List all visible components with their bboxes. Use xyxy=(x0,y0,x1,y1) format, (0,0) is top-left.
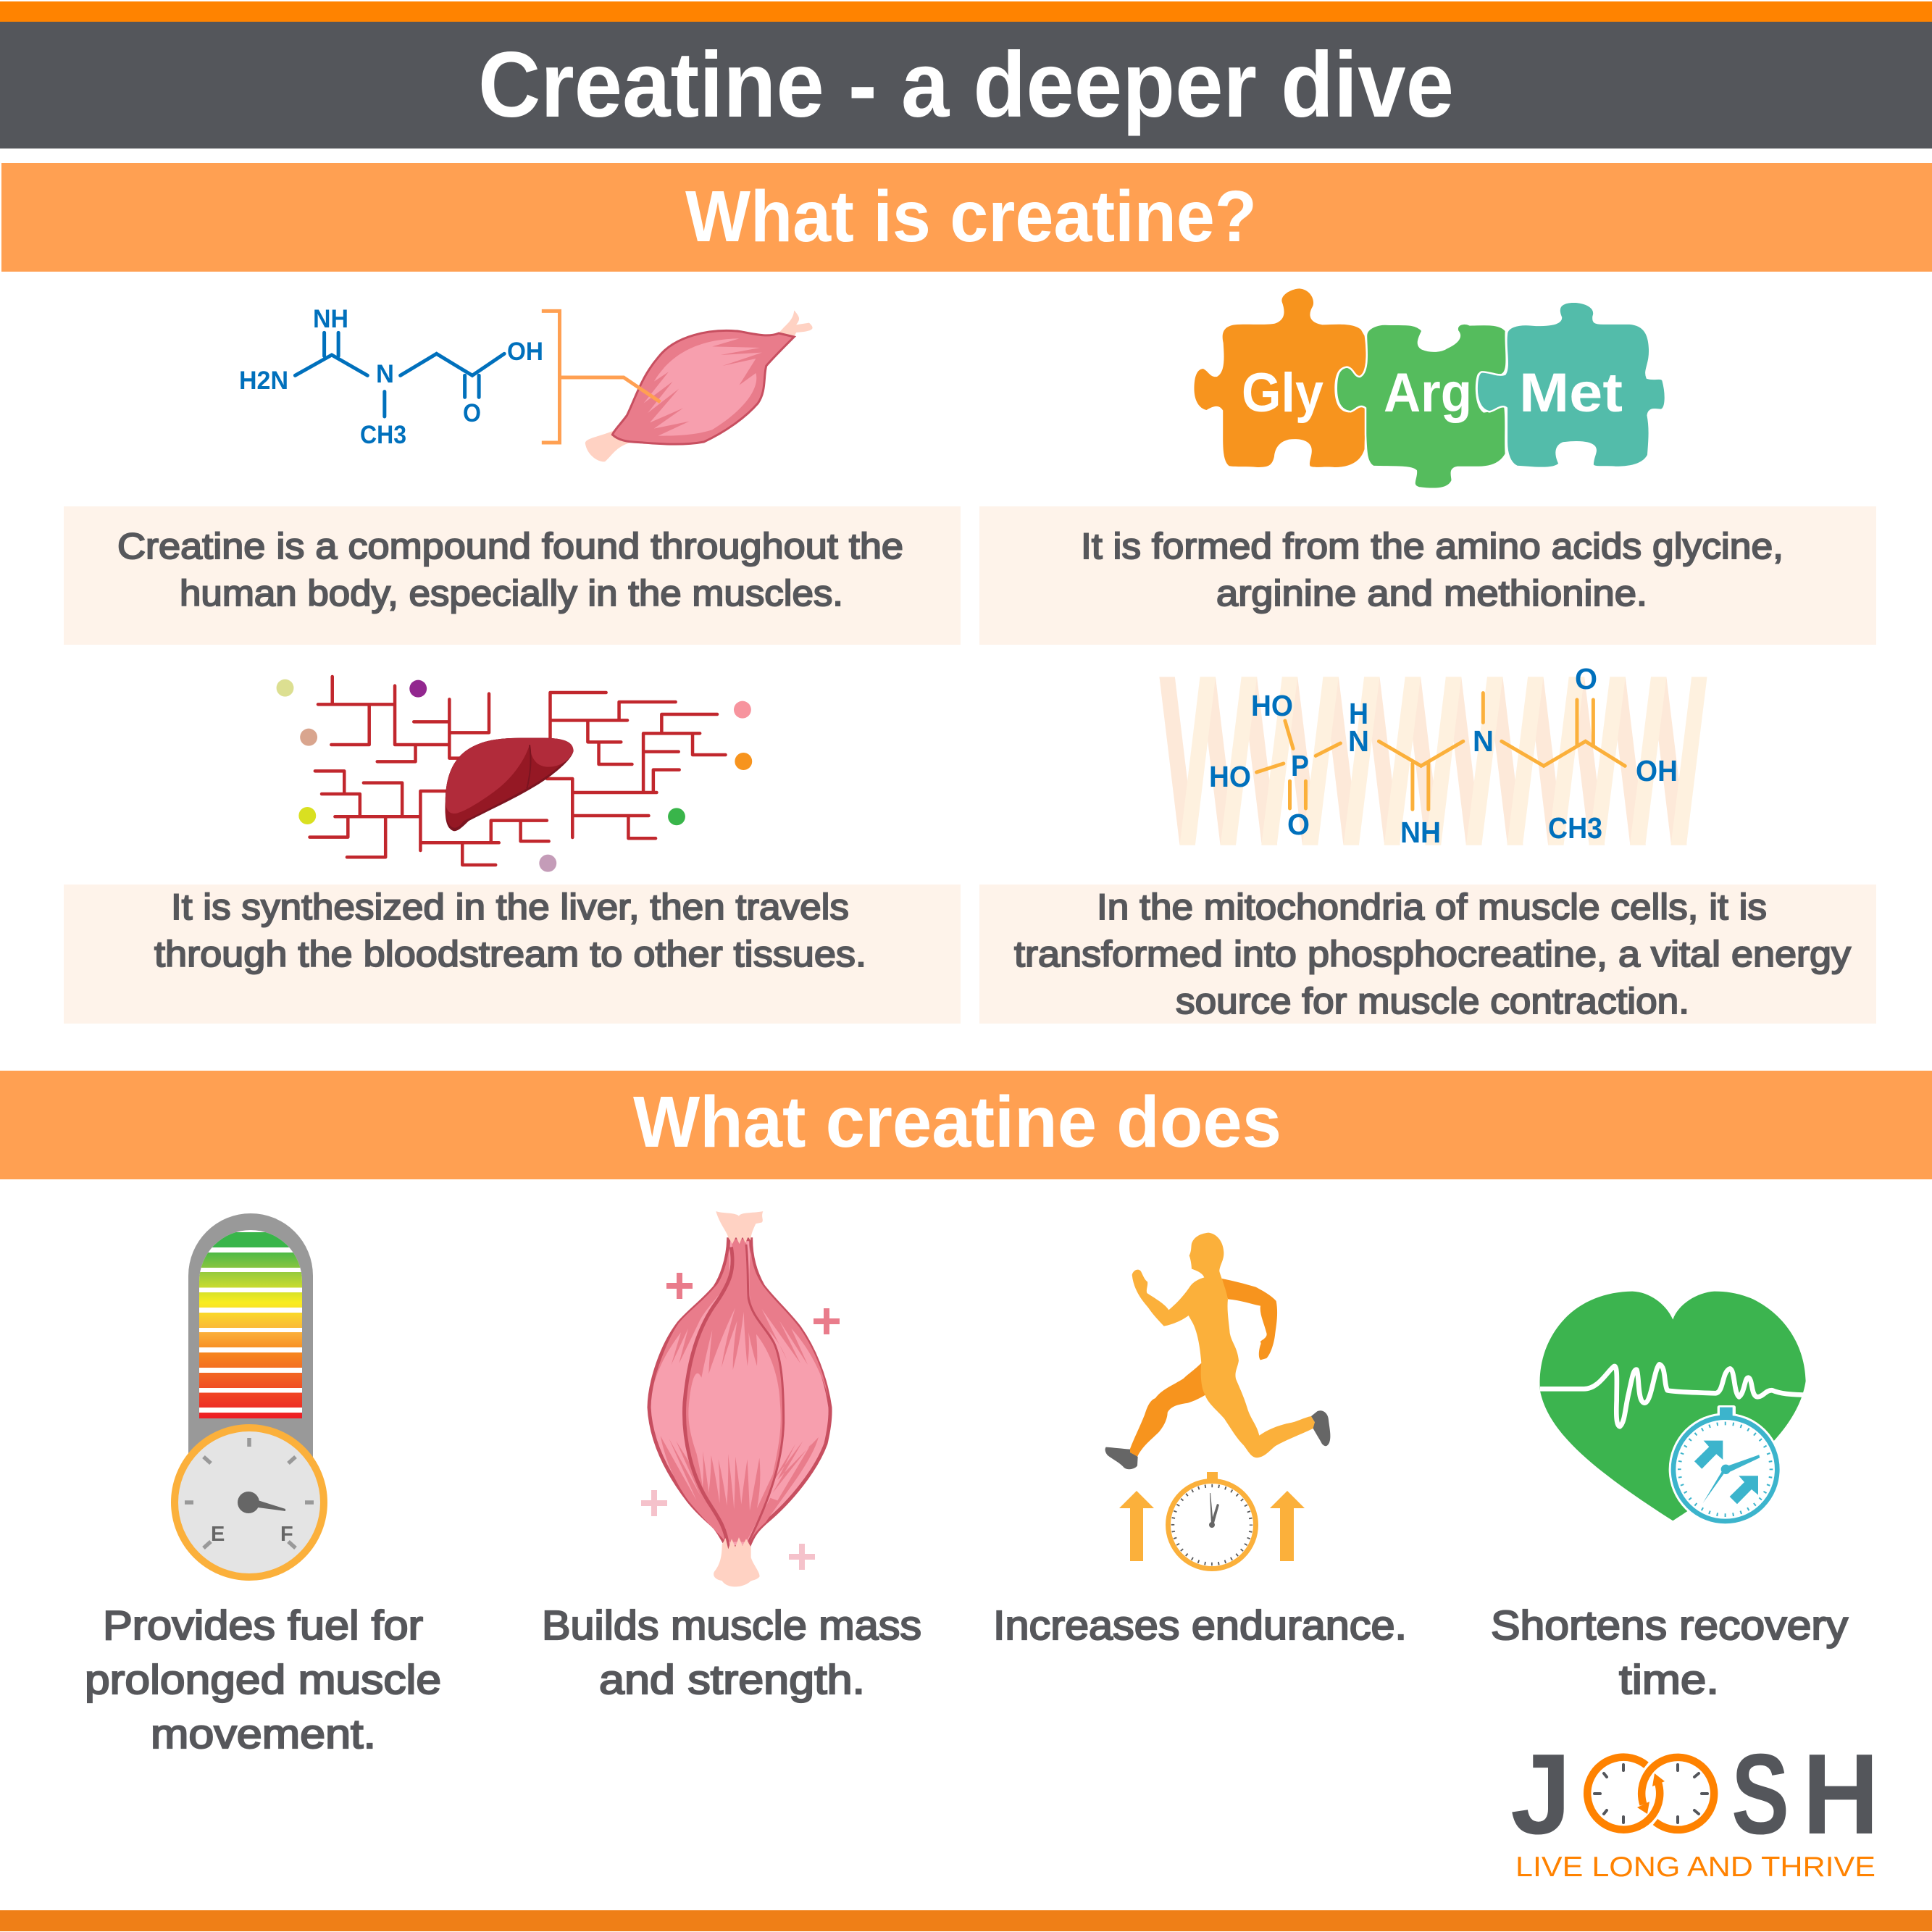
section banner: what creatine does xyxy=(0,1071,1932,1179)
icon: fuel gauge xyxy=(175,1213,324,1577)
icon: amino acid puzzle: Arg xyxy=(1384,362,1472,424)
icon: phosphocreatine molecule: O xyxy=(1287,808,1310,841)
icon: stopwatch xyxy=(1168,1472,1256,1569)
panel: liver text: It is synthesized in the liver, then travels xyxy=(171,887,849,927)
panel: mitochondria text: transformed into phosphocreatine, a vital energy xyxy=(1014,934,1851,974)
panel: compound text xyxy=(64,506,961,645)
caption: endurance: Increases endurance. xyxy=(993,1602,1407,1649)
icon: large muscle with pluses xyxy=(649,1211,830,1586)
panel: compound text: human body, especially in the muscles. xyxy=(180,573,843,614)
title: Creatine - a deeper dive xyxy=(478,33,1454,137)
icon: creatine molecule: OH xyxy=(507,338,543,366)
logo: JOOSH xyxy=(1510,1731,1879,1883)
caption: recovery: time. xyxy=(1619,1657,1719,1703)
title bar xyxy=(0,22,1932,149)
caption: recovery xyxy=(1491,1602,1849,1703)
icon: heart with stopwatch xyxy=(1540,1292,1806,1526)
icon: creatine molecule: NH xyxy=(313,305,348,333)
icon: amino acid puzzle: Gly xyxy=(1242,362,1323,424)
panel: liver text xyxy=(64,885,961,1024)
panel: mitochondria text: source for muscle contraction. xyxy=(1176,981,1689,1021)
logo: JOOSH: J xyxy=(1510,1731,1571,1858)
top orange strip xyxy=(0,1,1932,22)
icon: runner xyxy=(1105,1233,1330,1469)
icon: creatine molecule: N xyxy=(376,360,394,388)
icon: amino acid puzzle xyxy=(1194,288,1665,489)
panel: mitochondria text xyxy=(979,885,1876,1024)
icon: creatine molecule: O xyxy=(463,399,481,427)
icon: fuel gauge: F xyxy=(280,1523,293,1546)
icon: up arrow right xyxy=(1270,1491,1305,1561)
tagline: LIVE LONG AND THRIVE xyxy=(1515,1852,1875,1883)
icon: phosphocreatine molecule: NH xyxy=(1400,816,1441,849)
panel: mitochondria text: In the mitochondria of muscle cells, it is xyxy=(1097,887,1767,927)
panel: amino acids text xyxy=(979,506,1876,645)
icon: creatine molecule xyxy=(239,305,543,449)
icon: phosphocreatine molecule xyxy=(1159,662,1707,849)
bottom orange strip xyxy=(0,1910,1932,1931)
icon: phosphocreatine molecule: O xyxy=(1575,662,1597,695)
icon: phosphocreatine molecule: OH xyxy=(1636,754,1678,787)
caption: fuel: movement. xyxy=(151,1711,376,1757)
heading: What creatine does xyxy=(633,1082,1281,1163)
icon: muscle with bracket xyxy=(542,310,813,461)
caption: fuel xyxy=(85,1602,441,1757)
icon: phosphocreatine molecule: P xyxy=(1291,749,1309,782)
section banner: what is creatine xyxy=(1,163,1932,272)
icon: phosphocreatine molecule: CH3 xyxy=(1548,811,1602,845)
panel: amino acids text: It is formed from the amino acids glycine, xyxy=(1081,526,1783,566)
icon: creatine molecule: H2N xyxy=(239,367,288,395)
logo: JOOSH: S xyxy=(1731,1731,1789,1858)
icons: plus signs xyxy=(641,1273,840,1570)
caption: muscle xyxy=(542,1602,921,1703)
caption: fuel: prolonged muscle xyxy=(85,1657,441,1703)
icon: amino acid puzzle: Met xyxy=(1519,362,1623,424)
caption: fuel: Provides fuel for xyxy=(103,1602,423,1649)
icon: phosphocreatine molecule: HO xyxy=(1251,689,1293,722)
icon: phosphocreatine molecule: HO xyxy=(1209,760,1251,793)
panel: amino acids text: arginine and methionine. xyxy=(1216,573,1647,614)
panel: liver text: through the bloodstream to other tissues. xyxy=(154,934,866,974)
icon: up arrow left xyxy=(1119,1491,1154,1561)
icon: creatine molecule: CH3 xyxy=(360,421,406,449)
caption: recovery: Shortens recovery xyxy=(1491,1602,1849,1649)
icon: phosphocreatine molecule: H xyxy=(1349,697,1368,730)
caption: muscle: Builds muscle mass xyxy=(542,1602,921,1649)
icon: phosphocreatine molecule: N xyxy=(1348,724,1369,758)
icon: liver and bloodstream xyxy=(277,677,752,872)
heading: What is creatine? xyxy=(685,176,1257,257)
panel: compound text: Creatine is a compound found throughout the xyxy=(117,526,903,566)
logo: JOOSH: H xyxy=(1802,1731,1879,1858)
caption: muscle: and strength. xyxy=(599,1657,865,1703)
icon: phosphocreatine molecule: N xyxy=(1473,724,1494,758)
icon: fuel gauge: E xyxy=(211,1523,225,1546)
